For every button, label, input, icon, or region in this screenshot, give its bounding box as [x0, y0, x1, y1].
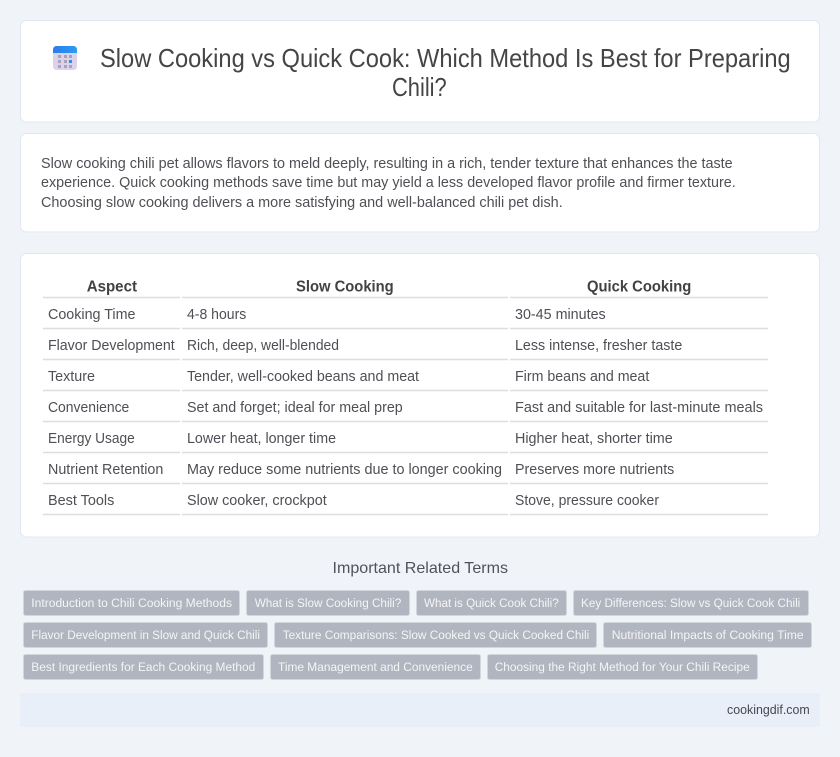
row: energy usage: Lower heat, longer time [187, 431, 336, 447]
tag: Choosing the Right Method for Your Chili Recipe [495, 660, 750, 674]
tag [274, 622, 596, 648]
tag: What is Slow Cooking Chili? [255, 596, 402, 610]
table header row: Quick Cooking [587, 278, 691, 296]
row: flavor development [48, 338, 682, 354]
row: best tools: Best Tools [48, 493, 114, 509]
tag: Nutritional Impacts of Cooking Time [612, 628, 804, 642]
tag [270, 654, 480, 680]
row: texture: Tender, well-cooked beans and meat [187, 369, 419, 385]
row: nutrient retention [48, 462, 674, 478]
row: cooking time: Cooking Time [48, 307, 136, 323]
title: Slow Cooking vs Quick Cook: Which Method Is Best for Preparing [100, 45, 791, 73]
tag [246, 590, 410, 616]
tag: Best Ingredients for Each Cooking Method [31, 660, 255, 674]
heading: important related terms: Important Related Terms [332, 560, 508, 577]
row: nutrient retention: Preserves more nutrients [515, 462, 674, 478]
tag: Introduction to Chili Cooking Methods [31, 596, 232, 610]
tag: Texture Comparisons: Slow Cooked vs Quick Cooked Chili [283, 628, 589, 642]
tag: What is Quick Cook Chili? [424, 596, 559, 610]
title: Chili? [392, 74, 447, 102]
tag [24, 654, 264, 680]
row: energy usage: Higher heat, shorter time [515, 431, 673, 447]
table header row [87, 278, 691, 296]
panel: comparison table [20, 254, 820, 537]
panel: title header [20, 20, 820, 122]
title [100, 45, 791, 102]
row: cooking time [48, 307, 606, 323]
tag: Key Differences: Slow vs Quick Cook Chili [581, 596, 800, 610]
row: texture: Texture [48, 369, 95, 385]
table header row: Aspect [87, 278, 138, 296]
panel: introduction text [20, 134, 820, 232]
row: texture [48, 369, 649, 385]
row: convenience: Set and forget; ideal for meal prep [187, 400, 403, 416]
icon: calendar [53, 46, 77, 70]
row: convenience: Fast and suitable for last-minute meals [515, 400, 763, 416]
tag [604, 622, 812, 648]
row: cooking time: 4-8 hours [187, 307, 246, 323]
row: convenience: Convenience [48, 400, 129, 416]
row: flavor development: Less intense, fresher taste [515, 338, 682, 354]
row: nutrient retention: Nutrient Retention [48, 462, 163, 478]
row: energy usage: Energy Usage [48, 431, 135, 447]
footer: cookingdif.com [727, 702, 810, 717]
row: best tools [48, 493, 659, 509]
row: energy usage [48, 431, 673, 447]
tag [488, 654, 758, 680]
tag [574, 590, 808, 616]
tag: Time Management and Convenience [278, 660, 473, 674]
row: cooking time: 30-45 minutes [515, 307, 606, 323]
tag [24, 590, 240, 616]
related term tags [24, 590, 812, 680]
tag: Flavor Development in Slow and Quick Chili [31, 628, 260, 642]
panel: introduction text: Slow cooking chili pet allows flavors to meld deeply, resulting in a rich, tender texture that enhances the taste [41, 156, 733, 172]
row: convenience [48, 400, 763, 416]
panel: introduction text: Choosing slow cooking delivers a more satisfying and well-balanced chili pet dish. [41, 195, 563, 211]
tag [24, 622, 268, 648]
footer [20, 693, 820, 727]
row: nutrient retention: May reduce some nutrients due to longer cooking [187, 462, 502, 478]
row: best tools: Stove, pressure cooker [515, 493, 659, 509]
table header row: Slow Cooking [296, 278, 394, 296]
row: texture: Firm beans and meat [515, 369, 649, 385]
tag [416, 590, 566, 616]
row: best tools: Slow cooker, crockpot [187, 493, 327, 509]
row: flavor development: Rich, deep, well-blended [187, 338, 339, 354]
panel: introduction text: experience. Quick cooking methods save time but may yield a less developed flavor profile and firmer texture. [41, 175, 736, 191]
row: flavor development: Flavor Development [48, 338, 175, 354]
